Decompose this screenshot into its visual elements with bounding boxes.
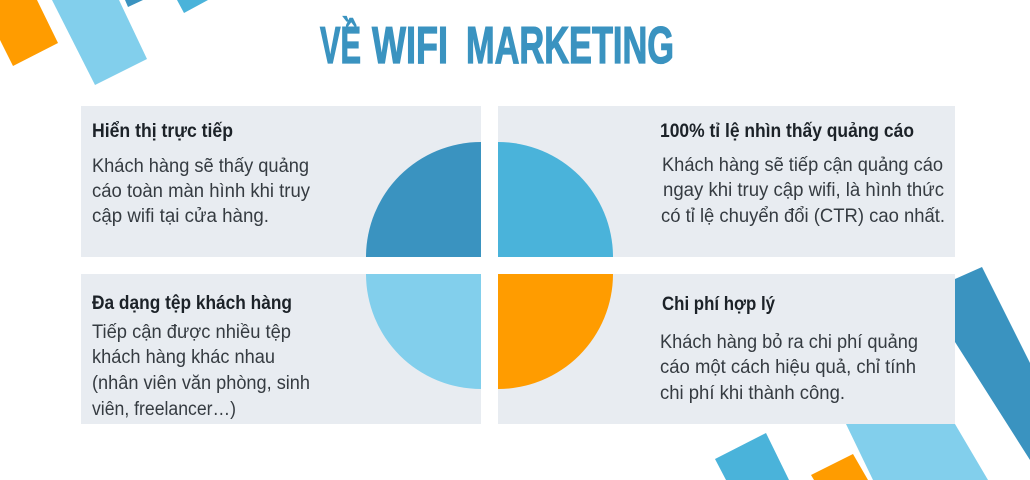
title: VỀ — [320, 16, 361, 75]
text: Chi phí description: Khách hàng bỏ ra chi phí quảng — [660, 332, 918, 353]
panel: Hiển thị trực tiếp — [81, 106, 481, 257]
text: 100% description: có tỉ lệ chuyển đổi (CTR) cao nhất. — [661, 206, 945, 227]
panel: Chi phí hợp lý — [498, 274, 955, 424]
text: Đa dạng description: (nhân viên văn phòng, sinh — [92, 373, 310, 394]
title: MARKETING — [466, 17, 674, 75]
heading: Đa dạng tệp khách hàng: Đa dạng tệp khách hàng — [92, 292, 292, 314]
text: Hiển thị trực tiếp description — [92, 156, 310, 227]
text: Đa dạng description: Tiếp cận được nhiều tệp — [92, 322, 291, 343]
text: Chi phí description — [660, 332, 918, 404]
heading: Chi phí hợp lý: Chi phí hợp lý — [662, 293, 775, 315]
heading: Hiển thị trực tiếp: Hiển thị trực tiếp — [92, 120, 233, 142]
panel: Đa dạng tệp khách hàng — [81, 274, 481, 424]
quadrant: bottom left — [366, 274, 481, 389]
text: Hiển thị trực tiếp description: cáo toàn màn hình khi truy — [92, 181, 310, 202]
text: Đa dạng description: viên, freelancer…) — [92, 399, 236, 420]
title — [320, 16, 674, 75]
text: Chi phí description: chi phí khi thành công. — [660, 383, 845, 404]
quadrant: top right — [498, 142, 613, 257]
text: 100% description: ngay khi truy cập wifi, là hình thức — [663, 180, 944, 201]
decoration: top left bars — [0, 0, 208, 85]
text: Hiển thị trực tiếp description: Khách hàng sẽ thấy quảng — [92, 156, 309, 177]
decoration: bottom right bars — [715, 267, 1030, 480]
text: Chi phí description: cáo một cách hiệu quả, chỉ tính — [660, 357, 916, 378]
text: Hiển thị trực tiếp description: cập wifi tại cửa hàng. — [92, 206, 269, 227]
panel: 100% tỉ lệ nhìn thấy quảng cáo — [498, 106, 955, 257]
title: WIFI — [372, 17, 448, 75]
text: 100% description: Khách hàng sẽ tiếp cận quảng cáo — [662, 155, 943, 176]
quadrant: top left — [366, 142, 481, 257]
quadrant: bottom right — [498, 274, 613, 389]
heading: 100% tỉ lệ nhìn thấy quảng cáo: 100% tỉ lệ nhìn thấy quảng cáo — [660, 120, 914, 142]
text: 100% description — [661, 155, 945, 227]
text: Đa dạng description: khách hàng khác nhau — [92, 347, 275, 368]
text: Đa dạng description — [92, 322, 310, 420]
